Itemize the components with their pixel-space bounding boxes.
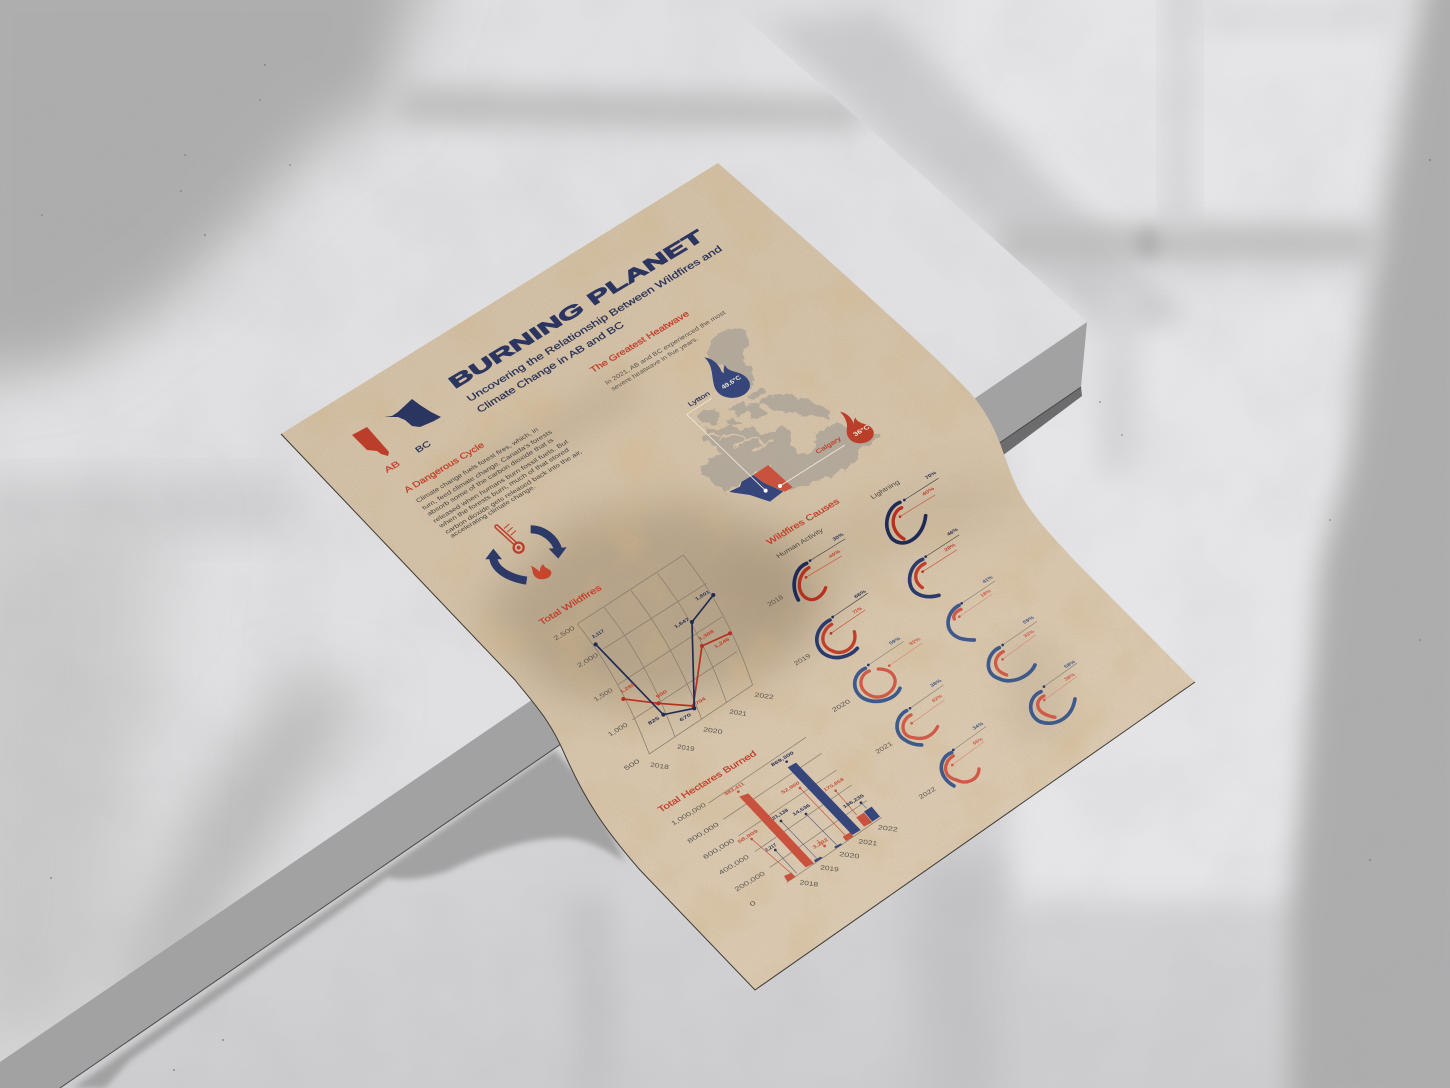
data labels: 1,801: [694, 589, 711, 601]
label: Human Activity: Human Activity: [775, 527, 826, 560]
data labels: 825: [647, 715, 661, 726]
icon: blue flame: [704, 357, 750, 398]
text block: heatwave description: severe heatwave in five years.: [610, 336, 700, 393]
axes labels: 2021: [729, 709, 748, 718]
axis labels: 2018: [799, 879, 819, 889]
year labels: [766, 594, 938, 801]
data labels: 869,300: [770, 750, 795, 767]
leader: Lytton: [687, 398, 766, 491]
chart: total wildfires: [536, 555, 775, 772]
arrow: left: [485, 549, 527, 581]
map: Canada with AB and BC: [687, 328, 879, 502]
axes labels: 1,000: [607, 722, 630, 738]
axis labels: 2022: [877, 824, 899, 834]
ring: human activity 2018: 40%: [827, 548, 842, 559]
ring: human activity 2020: 92%: [908, 636, 923, 646]
data labels: 1,647: [673, 617, 691, 629]
icon: thermometer: [497, 524, 524, 553]
data labels: 136,235: [842, 793, 865, 809]
ring: lightning 2022: 58%: [1063, 659, 1077, 669]
ring: lightning 2019: 28%: [943, 542, 958, 552]
ring: lightning 2020: 41%: [981, 574, 995, 584]
data labels: 52,960: [780, 780, 801, 795]
leader: Calgary: [780, 445, 845, 486]
subtitle: Climate Change in AB and BC: [475, 320, 627, 415]
year labels: 2019: [793, 652, 813, 667]
axis labels: 2021: [858, 838, 878, 848]
axes labels: 2018: [650, 762, 670, 771]
axes labels: 2020: [703, 726, 723, 736]
ring: human activity 2019: 66%: [853, 588, 868, 599]
data labels: 3,292: [811, 837, 830, 850]
heading: The Greatest Heatwave: The Greatest Heatwave: [588, 309, 691, 375]
icon: climate cycle: [485, 524, 567, 581]
ring: lightning 2021: 59%: [1022, 614, 1036, 625]
data labels: 950: [655, 689, 669, 699]
year labels: 2021: [874, 740, 895, 755]
data labels: 58,909: [736, 828, 760, 844]
data labels: 170,858: [822, 777, 846, 792]
leader lines: [752, 788, 867, 877]
marker: Lytton: [764, 489, 768, 493]
ring: human activity 2022: 65%: [972, 736, 985, 746]
axis labels: [670, 802, 899, 908]
floor shadow under slab and paper: [73, 750, 625, 1088]
axis labels: 600,000: [702, 837, 737, 861]
text block: heatwave description: [604, 309, 728, 393]
title: BURNING PLANET: [445, 226, 708, 392]
label: Calgary temperature: 36°C: [851, 423, 872, 438]
ring: human activity 2020: 59%: [888, 635, 902, 646]
year labels: 2020: [831, 698, 853, 714]
axes labels: 2019: [677, 744, 695, 753]
data labels: 14,536: [791, 803, 812, 817]
icon: British Columbia: [384, 399, 441, 427]
ring: lightning 2019: 46%: [946, 526, 960, 537]
text block: cycle description: accelerating climate change.: [449, 484, 538, 540]
ring: lightning 2018: 70%: [924, 470, 938, 480]
slab: side face: [0, 322, 1087, 1088]
text block: cycle description: absorb some of the carbon dioxide that is: [426, 437, 555, 518]
ring: human activity 2018: 30%: [831, 531, 846, 542]
chart: total hectares burned: [655, 737, 899, 908]
label: AB: AB: [382, 458, 402, 475]
marker: Calgary: [778, 484, 782, 488]
data labels: 21,138: [771, 807, 790, 821]
label: Lytton: Lytton: [687, 390, 712, 408]
ring: human activity 2022: [941, 721, 986, 786]
ring: human activity 2018: [794, 531, 846, 600]
ring: human activity 2020: [855, 635, 923, 701]
series: navy: [594, 593, 715, 717]
map: Alberta: [753, 465, 793, 492]
axis labels: 800,000: [686, 821, 721, 845]
ring: lightning 2022: 38%: [1063, 672, 1077, 682]
icon: flame: [531, 564, 551, 579]
heading: Total Hectares Burned: Total Hectares Burned: [655, 748, 759, 814]
axis labels: 1,000,000: [670, 802, 708, 827]
text block: cycle description: [415, 426, 584, 540]
ring: lightning 2019: [910, 526, 960, 597]
series: red: [621, 631, 732, 708]
slab shadow right: [1000, 387, 1082, 456]
bars: navy: [788, 763, 880, 862]
axes labels: 2,500: [552, 625, 577, 642]
icon: red flame: [840, 412, 874, 443]
ring: lightning 2018: 40%: [921, 485, 936, 497]
axes labels: 2,000: [576, 652, 601, 669]
text block: cycle description: carbon dioxide gets released back into the air,: [444, 449, 584, 536]
axis labels: 400,000: [717, 853, 751, 877]
axis labels: 2020: [839, 851, 860, 861]
axes labels: 1,500: [592, 687, 615, 703]
data labels: 670: [678, 712, 693, 722]
ring: human activity 2019: 71%: [851, 606, 864, 615]
data labels: 1,308: [697, 629, 715, 641]
data labels: [591, 589, 731, 726]
data labels: [723, 750, 865, 852]
ring: human activity 2019: [817, 588, 868, 658]
ring: lightning 2020: [948, 574, 995, 640]
text block: cycle description: released when humans burn fossil fuels. But: [432, 439, 570, 525]
data labels: 1,246: [713, 636, 731, 649]
ring: human activity 2021: 62%: [931, 693, 944, 703]
text block: cycle description: turn, feed climate change. Canada's forests: [421, 429, 554, 512]
data labels: 883,411: [723, 781, 746, 796]
ring: human activity 2022: 34%: [971, 721, 985, 731]
ring: human activity 2021: 38%: [929, 678, 944, 688]
axis labels: 200,000: [733, 870, 767, 893]
data labels: 1,288: [619, 682, 636, 694]
year labels: 2022: [917, 786, 938, 801]
chart: wildfire causes: [764, 470, 1077, 801]
marker dots: [737, 760, 862, 851]
label: Lightning: Lightning: [869, 479, 902, 501]
axes labels: 2022: [754, 692, 775, 701]
ring: lightning 2021: 33%: [1022, 628, 1036, 638]
map: British Columbia: [729, 475, 783, 502]
subtitle: Uncovering the Relationship Between Wildfires and: [465, 244, 725, 404]
heading: A Dangerous Cycle: A Dangerous Cycle: [402, 440, 487, 495]
text block: cycle description: when the forests burn, much of that stored: [437, 447, 571, 530]
bars: red: [739, 793, 872, 882]
label: BC: BC: [413, 439, 433, 455]
text block: cycle description: Climate change fuels forest fires, which, in: [415, 426, 541, 505]
heading: Wildfires Causes: Wildfires Causes: [764, 496, 842, 547]
subtitle: [465, 244, 725, 415]
paper sheet: [270, 150, 1210, 1000]
axes labels: [552, 625, 775, 772]
year labels: 2018: [766, 594, 786, 608]
ring: lightning 2018: [887, 470, 938, 543]
ring: lightning 2020: 18%: [979, 588, 993, 598]
label: Calgary: Calgary: [814, 435, 844, 456]
axis labels: 0: [748, 900, 758, 908]
axis labels: 2019: [820, 864, 840, 874]
data labels: 2,217: [764, 842, 778, 852]
ring: lightning 2021: [988, 614, 1037, 681]
ring: human activity 2021: [897, 678, 944, 745]
text block: heatwave description: In 2021, AB and BC experienced the most: [604, 309, 728, 387]
label: Lytton temperature: 49.6°C: [719, 374, 743, 391]
data labels: 2,117: [591, 628, 606, 639]
axes labels: 500: [623, 758, 642, 772]
map: land: [695, 328, 879, 493]
heading: Total Wildfires: Total Wildfires: [536, 582, 604, 627]
arrow: right: [531, 529, 567, 559]
icon: Alberta: [352, 427, 389, 456]
ring: lightning 2022: [1031, 659, 1077, 723]
slab: top surface with shadows: [0, 0, 1042, 978]
data labels: 704: [694, 696, 707, 706]
